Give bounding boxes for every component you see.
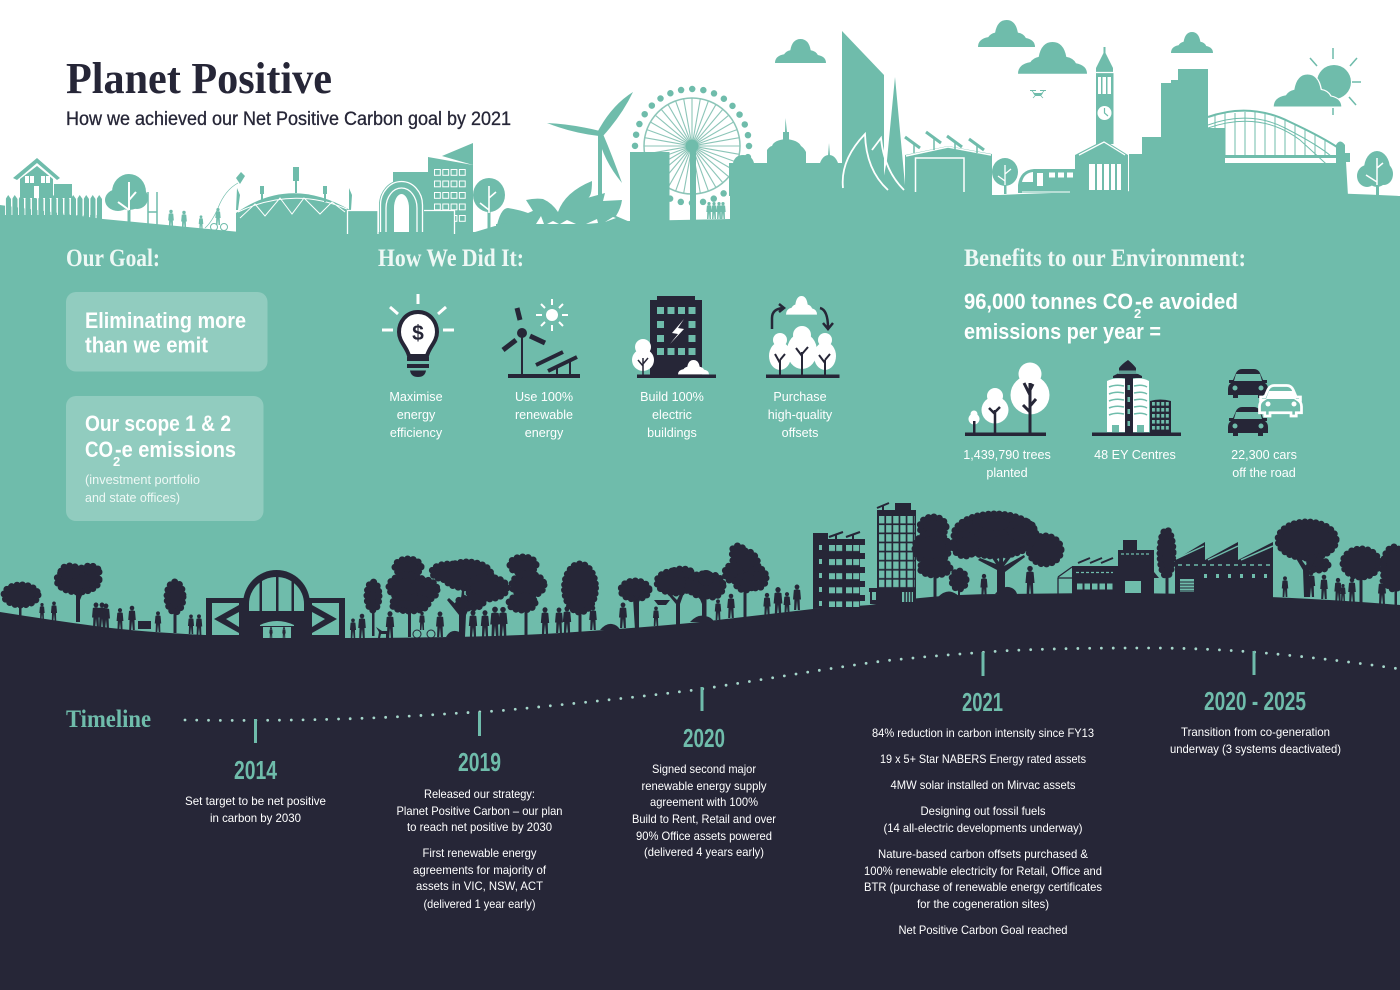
goal panel: eliminating xyxy=(66,292,268,372)
timeline: 2019: 2019 xyxy=(458,747,501,777)
skyline: right tree xyxy=(1357,151,1393,196)
skyline: small tree and train xyxy=(992,158,1076,194)
icon: electric building xyxy=(632,296,716,378)
skyline: opera house xyxy=(496,181,630,232)
skyline: park tree xyxy=(105,174,148,226)
skyline: bridge xyxy=(1208,111,1350,196)
skyline: domed heritage block xyxy=(729,118,845,196)
skyline: tower with windows xyxy=(393,143,473,232)
label: build 100% electric buildings: Build 100% xyxy=(640,390,704,404)
heading: how we did it: How We Did It: xyxy=(378,245,524,272)
label: purchase high-quality offsets: high-quality xyxy=(768,408,833,422)
timeline markers xyxy=(256,651,1254,743)
icon: wind and solar xyxy=(503,299,580,376)
label: use 100% renewable energy: renewable xyxy=(515,408,573,422)
skyline: kite xyxy=(205,172,245,228)
timeline: 2020: agreement with 100% xyxy=(650,795,758,809)
timeline: 2020 - 2025 xyxy=(1170,686,1341,756)
timeline: 2014: Set target to be net positive xyxy=(185,794,326,808)
teal landscape background xyxy=(0,191,1400,700)
timeline dotted curve xyxy=(185,648,1400,720)
timeline: 2021: 84% reduction in carbon intensity since FY13 xyxy=(872,726,1094,740)
skyline: stepped high-rise xyxy=(1129,69,1225,196)
label: cars off road: off the road xyxy=(1232,466,1296,480)
timeline: 2021: Net Positive Carbon Goal reached xyxy=(898,923,1068,937)
timeline heading: Timeline xyxy=(66,706,151,733)
skyline: runners and cyclist xyxy=(168,208,228,230)
benefits statement xyxy=(964,289,1238,344)
cloud xyxy=(775,39,826,63)
dark ground hill xyxy=(0,593,1400,990)
goal panel: eliminating: than we emit xyxy=(85,332,209,358)
community silhouette: shopping centre xyxy=(206,570,345,640)
timeline: 2019: First renewable energy xyxy=(422,846,536,860)
community silhouette: apartment building xyxy=(813,532,865,609)
skyline: ferris wheel xyxy=(630,89,749,222)
skyline: arched building xyxy=(347,180,455,234)
timeline: 2019 xyxy=(396,747,562,911)
goal panel: scope: Our scope 1 & 2 xyxy=(85,411,231,436)
timeline: 2021: 19 x 5+ Star NABERS Energy rated assets xyxy=(880,752,1086,766)
timeline: 2020 xyxy=(632,723,776,859)
icon: cars xyxy=(1228,369,1302,436)
skyline: shed with solar panels xyxy=(905,132,992,196)
sun with cloud xyxy=(1273,48,1361,115)
community silhouette: right trees xyxy=(1278,522,1400,608)
timeline: 2020 - 2025: Transition from co-generation xyxy=(1181,725,1330,739)
heading: our goal: Our Goal: xyxy=(66,245,160,272)
timeline: 2019: assets in VIC, NSW, ACT xyxy=(416,879,544,893)
timeline: 2020: Build to Rent, Retail and over xyxy=(632,812,776,826)
community silhouette: large gum trees xyxy=(915,514,1061,599)
label: maximise energy efficiency: Maximise xyxy=(389,390,443,404)
label: EY centres: 48 EY Centres xyxy=(1094,448,1176,462)
timeline: 2014: in carbon by 2030 xyxy=(210,811,301,825)
benefits statement: emissions per year = xyxy=(964,319,1161,344)
community silhouette: people xyxy=(39,566,1386,638)
cloud xyxy=(1018,42,1087,74)
goal panel: scope: -e emissions xyxy=(115,437,236,462)
timeline: 2019: (delivered 1 year early) xyxy=(424,897,536,911)
community silhouette: sawtooth factory xyxy=(1175,542,1273,598)
goal panel: eliminating: Eliminating more xyxy=(85,308,246,333)
timeline: 2020: Signed second major xyxy=(652,762,756,776)
skyline: house and fence xyxy=(5,158,103,225)
timeline: 2020: (delivered 4 years early) xyxy=(644,845,764,859)
timeline: 2014: 2014 xyxy=(234,755,277,785)
icon: trees xyxy=(965,362,1050,436)
benefits statement: 96,000 tonnes CO xyxy=(964,289,1133,314)
label: build 100% electric buildings: buildings xyxy=(647,426,697,440)
timeline: 2021 xyxy=(864,687,1102,937)
timeline: 2020 - 2025: 2020 - 2025 xyxy=(1204,686,1306,716)
timeline: 2021: 2021 xyxy=(962,687,1003,717)
community silhouette: low-rise buildings and solar xyxy=(1058,540,1159,595)
timeline: 2019: Released our strategy: xyxy=(424,787,535,801)
goal panel: scope: and state offices) xyxy=(85,490,180,505)
timeline: 2021: (14 all-electric developments underway) xyxy=(884,821,1082,835)
timeline: 2019: to reach net positive by 2030 xyxy=(407,820,552,834)
timeline: 2020: renewable energy supply xyxy=(642,779,766,793)
goal panel: scope: CO xyxy=(85,437,113,462)
goal panel: scope: (investment portfolio xyxy=(85,472,200,487)
label: maximise energy efficiency: energy xyxy=(397,408,436,422)
label: trees planted: planted xyxy=(986,466,1028,480)
timeline: 2021: for the cogeneration sites) xyxy=(917,897,1049,911)
community silhouette: cypress tree xyxy=(1160,530,1173,594)
label: cars off road: 22,300 cars xyxy=(1231,448,1297,462)
timeline: 2019: agreements for majority of xyxy=(413,863,547,877)
icon: light bulb: $ xyxy=(412,322,424,345)
goal panel: scope xyxy=(66,396,264,521)
label: build 100% electric buildings: electric xyxy=(652,408,692,422)
timeline: 2021: Nature-based carbon offsets purchased & xyxy=(878,847,1088,861)
label: purchase high-quality offsets: offsets xyxy=(782,426,818,440)
timeline: 2021: BTR (purchase of renewable energy certificates xyxy=(864,880,1102,894)
label: purchase high-quality offsets: Purchase xyxy=(773,390,827,404)
timeline: 2021: 100% renewable electricity for Retail, Office and xyxy=(864,864,1102,878)
drone xyxy=(1030,90,1046,98)
cloud xyxy=(978,20,1035,47)
icon: EY centres tower xyxy=(1092,360,1181,436)
label: use 100% renewable energy: Use 100% xyxy=(515,390,573,404)
goal panel: scope: 2 xyxy=(113,454,120,469)
timeline: 2021: Designing out fossil fuels xyxy=(920,804,1046,818)
timeline: 2020: 90% Office assets powered xyxy=(636,829,772,843)
icon: offsets xyxy=(766,296,840,378)
label: trees planted: 1,439,790 trees xyxy=(963,448,1051,462)
label: maximise energy efficiency: efficiency xyxy=(390,426,443,440)
icon: light bulb xyxy=(382,294,454,377)
skyline: tall angular tower and spire xyxy=(842,31,906,196)
skyline: clock tower xyxy=(1075,47,1128,196)
cloud xyxy=(1171,32,1213,53)
community silhouette: central trees xyxy=(367,557,718,637)
subtitle: How we achieved our Net Positive Carbon goal by 2021 xyxy=(66,109,511,130)
timeline: 2020: 2020 xyxy=(683,723,725,753)
heading: benefits: Benefits to our Environment: xyxy=(964,245,1246,272)
skyline: street tree xyxy=(473,178,505,230)
skyline: wind turbine xyxy=(547,92,633,203)
timeline: 2020 - 2025: underway (3 systems deactivated) xyxy=(1170,742,1341,756)
timeline: 2021: 4MW solar installed on Mirvac assets xyxy=(890,778,1076,792)
benefits statement: 2 xyxy=(1134,306,1141,321)
timeline: 2014 xyxy=(185,755,326,825)
title: Planet Positive xyxy=(66,54,332,103)
community silhouette: office tower xyxy=(869,503,916,604)
timeline: 2019: Planet Positive Carbon – our plan xyxy=(396,804,562,818)
community silhouette: trees before towers xyxy=(698,546,766,622)
benefits statement: -e avoided xyxy=(1135,289,1238,314)
skyline: stadium xyxy=(236,167,352,232)
label: use 100% renewable energy: energy xyxy=(525,426,564,440)
community silhouette: trees left xyxy=(4,566,183,633)
skyline: goal posts xyxy=(148,192,157,228)
